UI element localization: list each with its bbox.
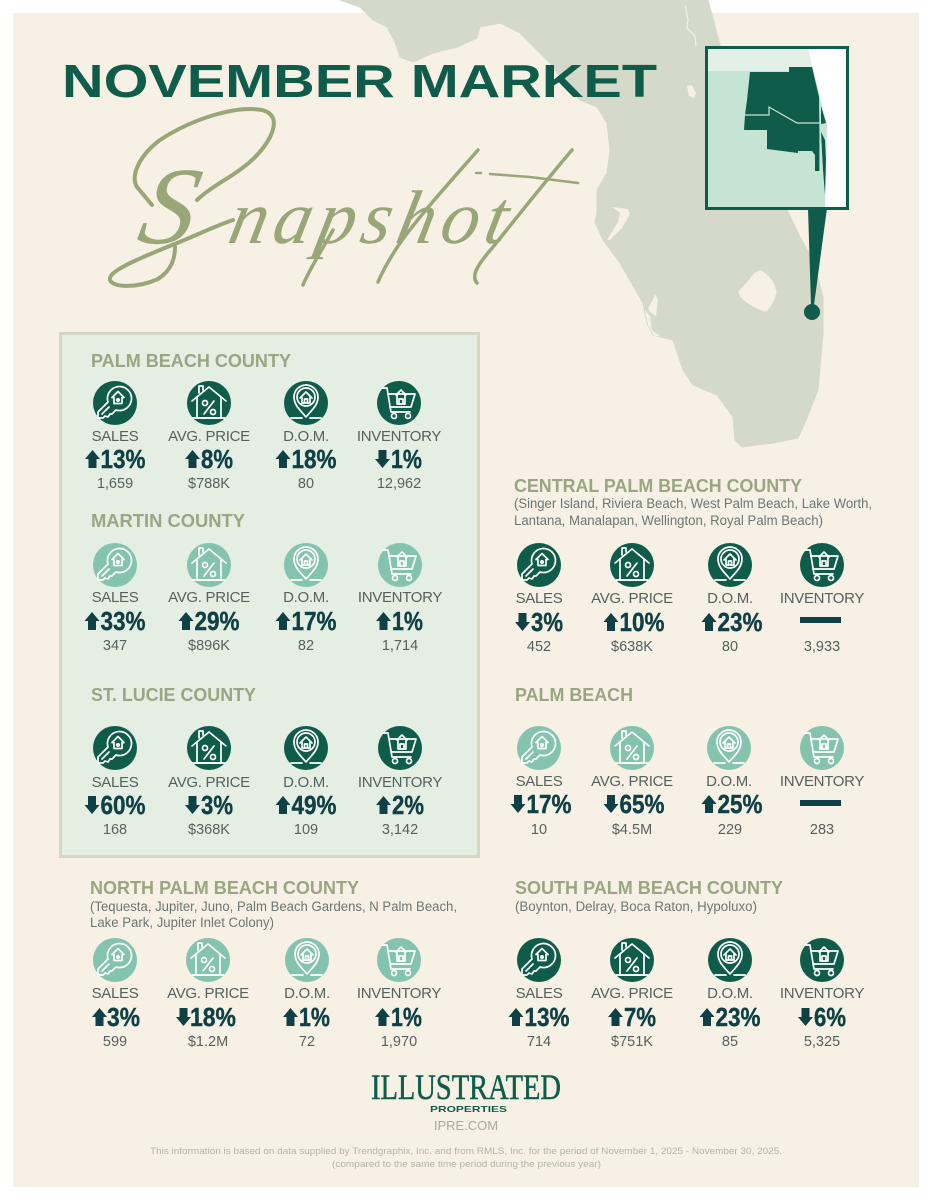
- stat: South days on market: 85: [722, 1034, 738, 1050]
- heading: Central Palm Beach County: CENTRAL PALM BEACH COUNTY: [514, 475, 803, 496]
- footer disclaimer: (compared to the same time period during the previous year): [332, 1159, 601, 1170]
- icon: map pin: [285, 938, 329, 982]
- arrow: up: [276, 450, 290, 468]
- logo: Illustrated Properties: [371, 1067, 561, 1114]
- icon: cart: [800, 726, 844, 770]
- stat: North days on market: 72: [299, 1034, 315, 1050]
- stat: Palm Beach days on market: D.O.M.: [706, 773, 752, 790]
- stat: Palm Beach County inventory: 12,962: [377, 476, 421, 492]
- arrow: up: [185, 450, 200, 468]
- icon: house percent: [187, 543, 231, 587]
- stat: South sales: 714: [527, 1034, 551, 1050]
- arrow: down: [176, 1008, 191, 1026]
- text block: South communities: (Boynton, Delray, Boca Raton, Hypoluxo): [515, 899, 757, 914]
- map: Florida silhouette: [340, 0, 823, 447]
- website: IPRE.COM: [434, 1118, 498, 1133]
- icon: map pin: [284, 381, 328, 425]
- icon: cart: [378, 726, 422, 770]
- stat: South days on market: [700, 938, 760, 1050]
- arrow: up: [376, 612, 391, 630]
- arrow: down: [515, 613, 530, 631]
- stat: South sales: SALES: [516, 985, 563, 1002]
- stat: St. Lucie sales: SALES: [92, 774, 139, 791]
- icon: map pin: [284, 543, 328, 587]
- stat: Martin sales: SALES: [92, 589, 139, 606]
- stat: Martin sales: [84, 543, 146, 654]
- icon: cart: [800, 543, 844, 587]
- icon: key: [517, 726, 561, 770]
- icon: house percent: [187, 381, 231, 425]
- stat: Central sales: [515, 543, 563, 655]
- panel: counties: [60, 334, 478, 856]
- stat: St. Lucie days on market: [276, 726, 336, 838]
- stat: North sales: 3%: [107, 1002, 140, 1032]
- arrow: up: [178, 612, 194, 630]
- stat: Martin days on market: 82: [298, 638, 314, 654]
- stat: Martin average price: AVG. PRICE: [168, 589, 250, 606]
- stat: Central days on market: 23%: [718, 607, 762, 637]
- panel: Palm Beach: [510, 684, 864, 838]
- stat: Central average price: [591, 543, 673, 655]
- arrow: down: [510, 795, 526, 813]
- stat: St. Lucie average price: $368K: [188, 822, 230, 838]
- stat: Martin sales: 33%: [100, 606, 146, 636]
- stat: Martin average price: [168, 543, 250, 654]
- stat: Palm Beach sales: 10: [531, 822, 547, 838]
- icon: key: [517, 938, 561, 982]
- stat: St. Lucie inventory: 3,142: [382, 822, 418, 838]
- stat: Palm Beach sales: [510, 726, 572, 838]
- stat: North average price: 18%: [190, 1002, 236, 1032]
- stat: Palm Beach County days on market: 18%: [292, 444, 336, 474]
- arrow: down: [604, 795, 618, 813]
- arrow: up: [276, 612, 290, 630]
- arrow: down: [798, 1008, 813, 1026]
- stat: South sales: 13%: [524, 1002, 570, 1032]
- stat: Palm Beach inventory: [780, 726, 864, 838]
- arrow: up: [700, 1008, 714, 1026]
- stat: North sales: [92, 938, 140, 1050]
- heading: Martin County: MARTIN COUNTY: [91, 510, 246, 531]
- arrow: up: [702, 613, 716, 631]
- logo: Illustrated Properties: PROPERTIES: [430, 1104, 507, 1114]
- stat: Central average price: 10%: [620, 607, 664, 637]
- stat: Palm Beach County inventory: [357, 381, 441, 492]
- stat: St. Lucie inventory: [358, 726, 442, 838]
- arrow: up: [85, 450, 100, 468]
- stat: Central sales: 452: [527, 639, 551, 655]
- stat: North average price: $1.2M: [188, 1034, 228, 1050]
- text block: North communities: (Tequesta, Jupiter, Juno, Palm Beach Gardens, N Palm Beach,: [90, 899, 457, 914]
- heading: St. Lucie County: ST. LUCIE COUNTY: [91, 684, 257, 705]
- stat: Palm Beach County average price: [168, 381, 250, 492]
- arrow: up: [508, 1008, 524, 1026]
- arrow: up: [608, 1008, 623, 1026]
- stat: Palm Beach days on market: [702, 726, 762, 838]
- stat: Central inventory: INVENTORY: [780, 590, 864, 607]
- stat: Palm Beach sales: SALES: [516, 773, 563, 790]
- footer disclaimer: [150, 1146, 782, 1170]
- stat: Palm Beach average price: AVG. PRICE: [591, 773, 673, 790]
- stat: Martin days on market: [276, 543, 336, 654]
- stat: South average price: 7%: [624, 1002, 656, 1032]
- icon: cart: [377, 938, 421, 982]
- stat: Martin days on market: 17%: [292, 606, 336, 636]
- stat: South average price: $751K: [611, 1034, 653, 1050]
- panel: Central Palm Beach County: [514, 475, 872, 655]
- stat: Palm Beach County average price: $788K: [188, 476, 230, 492]
- icon: house percent: [186, 938, 230, 982]
- stat: North inventory: INVENTORY: [357, 985, 441, 1002]
- stat: Palm Beach County sales: 13%: [100, 444, 146, 474]
- icon: key: [93, 938, 137, 982]
- stat: St. Lucie days on market: D.O.M.: [283, 774, 329, 791]
- icon: map pin: [284, 726, 328, 770]
- icon: key: [93, 726, 137, 770]
- arrow: up: [276, 796, 290, 814]
- panel: South Palm Beach County: [508, 877, 864, 1050]
- text block: Central communities: [514, 496, 872, 528]
- stat: Palm Beach average price: [591, 726, 673, 838]
- stat: Palm Beach average price: $4.5M: [612, 822, 652, 838]
- stat: Palm Beach inventory: INVENTORY: [780, 773, 864, 790]
- stat: St. Lucie sales: [84, 726, 146, 838]
- stat: Palm Beach average price: 65%: [620, 789, 664, 819]
- text block: Central communities: Lantana, Manalapan, Wellington, Royal Palm Beach): [514, 513, 823, 528]
- stat: Palm Beach County days on market: [276, 381, 336, 492]
- stat: North average price: AVG. PRICE: [167, 985, 249, 1002]
- arrow: down: [84, 796, 100, 814]
- title: NOVEMBER MARKET: [62, 55, 657, 107]
- stat: South days on market: 23%: [716, 1002, 760, 1032]
- stat: Central inventory: 3,933: [804, 639, 840, 655]
- logo: Illustrated Properties: ILLUSTRATED: [371, 1067, 561, 1107]
- icon: map pin: [707, 726, 751, 770]
- arrow: up: [604, 613, 618, 631]
- stat: Martin average price: 29%: [194, 606, 240, 636]
- stat: Central days on market: [702, 543, 762, 655]
- stat: South days on market: D.O.M.: [707, 985, 753, 1002]
- stat: Martin inventory: 1,714: [382, 638, 418, 654]
- stat: Palm Beach inventory: 283: [810, 822, 834, 838]
- stat: Central days on market: 80: [722, 639, 738, 655]
- stat: Palm Beach County average price: 8%: [201, 444, 233, 474]
- icon: map pin: [708, 543, 752, 587]
- heading: Palm Beach: PALM BEACH: [515, 684, 633, 705]
- stat: Palm Beach County inventory: 1%: [391, 444, 422, 474]
- stat: St. Lucie sales: 168: [103, 822, 127, 838]
- inset map with pin: [706, 48, 848, 320]
- stat: South inventory: 5,325: [804, 1034, 840, 1050]
- stat: St. Lucie days on market: 49%: [292, 790, 336, 820]
- icon: key: [93, 543, 137, 587]
- arrow: down: [185, 796, 200, 814]
- stat: Martin sales: 347: [103, 638, 127, 654]
- stat: North days on market: D.O.M.: [284, 985, 330, 1002]
- stat: South inventory: 6%: [814, 1002, 846, 1032]
- stat: South inventory: [780, 938, 864, 1050]
- stat: North inventory: 1%: [391, 1002, 422, 1032]
- icon: cart: [378, 543, 422, 587]
- stat: St. Lucie inventory: 2%: [392, 790, 424, 820]
- stat: St. Lucie average price: [168, 726, 250, 838]
- stat: South sales: [508, 938, 570, 1050]
- panel: North Palm Beach County: [90, 877, 457, 1050]
- icon: cart: [800, 938, 844, 982]
- stat: Palm Beach County days on market: D.O.M.: [283, 428, 329, 445]
- stat: North average price: [167, 938, 249, 1050]
- stat: Central sales: SALES: [516, 590, 563, 607]
- script subtitle: Snapshot: [110, 109, 578, 286]
- heading: South Palm Beach County: SOUTH PALM BEACH COUNTY: [515, 877, 784, 898]
- arrow: down: [375, 450, 390, 468]
- heading: Palm Beach County: PALM BEACH COUNTY: [91, 350, 292, 371]
- stat: Central inventory: [780, 543, 864, 655]
- stat: Palm Beach County days on market: 80: [298, 476, 314, 492]
- stat: South inventory: INVENTORY: [780, 985, 864, 1002]
- stat: North inventory: 1,970: [381, 1034, 417, 1050]
- arrow: up: [92, 1008, 107, 1026]
- stat: North sales: 599: [103, 1034, 127, 1050]
- icon: cart: [377, 381, 421, 425]
- stat: Palm Beach days on market: 229: [718, 822, 742, 838]
- script subtitle: Snapshot: S: [130, 146, 211, 268]
- heading: North Palm Beach County: NORTH PALM BEACH COUNTY: [90, 877, 360, 898]
- icon: key: [93, 381, 137, 425]
- stat: Martin inventory: INVENTORY: [358, 589, 442, 606]
- arrow: up: [84, 612, 100, 630]
- stat: Martin average price: $896K: [188, 638, 230, 654]
- icon: house percent: [610, 726, 654, 770]
- stat: South average price: AVG. PRICE: [591, 985, 673, 1002]
- stat: North sales: SALES: [92, 985, 139, 1002]
- stat: Palm Beach days on market: 25%: [718, 789, 762, 819]
- icon: map pin: [708, 938, 752, 982]
- stat: North inventory: [357, 938, 441, 1050]
- arrow: up: [376, 796, 391, 814]
- stat: Palm Beach County sales: SALES: [92, 428, 139, 445]
- stat: St. Lucie average price: 3%: [201, 790, 233, 820]
- stat: Central days on market: D.O.M.: [707, 590, 753, 607]
- stat: Central average price: AVG. PRICE: [591, 590, 673, 607]
- text block: North communities: Lake Park, Jupiter Inlet Colony): [90, 915, 274, 930]
- stat: South average price: [591, 938, 673, 1050]
- stat: Palm Beach County average price: AVG. PRICE: [168, 428, 250, 445]
- arrow: up: [283, 1008, 298, 1026]
- stat: Palm Beach sales: 17%: [526, 789, 572, 819]
- stat: North days on market: 1%: [299, 1002, 330, 1032]
- stat: Palm Beach County sales: 1,659: [97, 476, 133, 492]
- script subtitle: Snapshot: napshot: [222, 176, 523, 260]
- no-change dash: [800, 800, 841, 806]
- arrow: up: [375, 1008, 390, 1026]
- stat: North days on market: [283, 938, 330, 1050]
- text block: North communities: [90, 899, 457, 930]
- icon: house percent: [187, 726, 231, 770]
- stat: Central sales: 3%: [531, 607, 563, 637]
- arrow: up: [702, 795, 716, 813]
- text block: Central communities: (Singer Island, Riviera Beach, West Palm Beach, Lake Worth,: [514, 496, 872, 511]
- stat: Martin inventory: 1%: [392, 606, 423, 636]
- icon: house percent: [610, 543, 654, 587]
- footer disclaimer: This information is based on data supplied by Trendgraphix, Inc. and from RMLS, Inc. for the period of November 1, 2025 - November 30, 2025.: [150, 1146, 782, 1157]
- stat: St. Lucie sales: 60%: [100, 790, 146, 820]
- stat: St. Lucie inventory: INVENTORY: [358, 774, 442, 791]
- stat: Martin days on market: D.O.M.: [283, 589, 329, 606]
- no-change dash: [800, 617, 841, 623]
- stat: Palm Beach County sales: [85, 381, 146, 492]
- stat: Central average price: $638K: [611, 639, 653, 655]
- stat: Palm Beach County inventory: INVENTORY: [357, 428, 441, 445]
- icon: house percent: [610, 938, 654, 982]
- stat: Martin inventory: [358, 543, 442, 654]
- icon: key: [517, 543, 561, 587]
- stat: St. Lucie days on market: 109: [294, 822, 318, 838]
- stat: St. Lucie average price: AVG. PRICE: [168, 774, 250, 791]
